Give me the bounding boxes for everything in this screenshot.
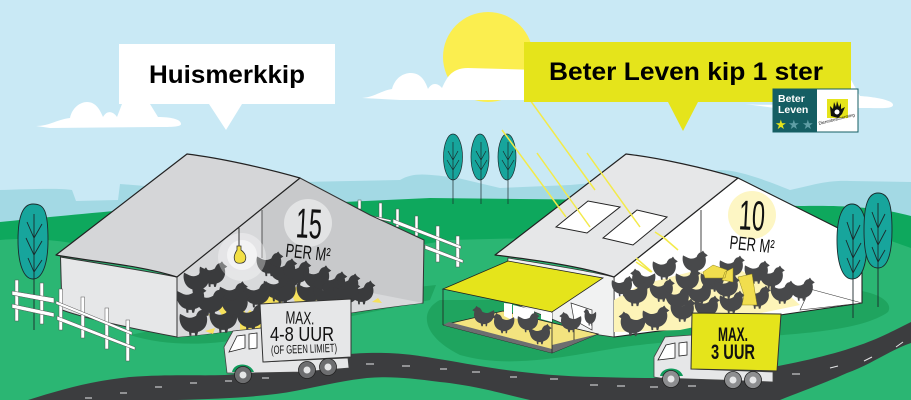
cab and chassis xyxy=(654,335,773,382)
duration label: MAX. xyxy=(718,325,748,346)
right truck: 3 UUR xyxy=(711,341,755,364)
floor xyxy=(443,311,598,353)
sun xyxy=(443,12,533,102)
Beter Leven logo: Beter xyxy=(778,93,805,105)
left barn xyxy=(56,154,424,337)
barn shadows xyxy=(130,285,889,361)
road markings xyxy=(85,342,903,398)
gable wall xyxy=(177,178,424,337)
cargo box xyxy=(260,299,351,362)
left truck: (OF GEEN LIMIET) xyxy=(271,341,337,357)
tree 2 xyxy=(471,134,489,204)
door xyxy=(571,303,592,330)
light bulb with glow xyxy=(218,228,266,281)
skylight 2 xyxy=(603,210,667,245)
hay bales xyxy=(703,265,757,305)
right truck xyxy=(654,313,781,388)
chickens left barn xyxy=(177,251,375,336)
sun rays xyxy=(502,100,678,272)
wheels xyxy=(234,358,336,384)
awning run xyxy=(443,261,603,353)
straw patches left barn xyxy=(205,285,382,334)
right fence behind left barn xyxy=(358,200,463,267)
Beter Leven logo xyxy=(773,89,858,133)
back trees xyxy=(444,134,516,204)
left barn density label xyxy=(284,199,332,266)
callout: Huismerkkip: Huismerkkip xyxy=(149,61,305,89)
duration label: MAX. xyxy=(285,308,315,328)
right barn density label: 10 xyxy=(738,191,766,240)
inner wall section xyxy=(177,210,262,337)
stars: ★ xyxy=(802,118,814,133)
interior straw xyxy=(614,270,800,332)
left barn density label: PER M² xyxy=(284,241,331,266)
callout: Beter Leven kip 1 ster: Beter Leven kip 1 ster xyxy=(549,58,823,86)
callout: Huismerkkip xyxy=(119,44,335,130)
road xyxy=(28,322,911,400)
chickens right barn xyxy=(472,251,815,344)
left barn density label: 15 xyxy=(295,199,323,248)
skylight 1 xyxy=(556,201,620,233)
stars: ★ xyxy=(775,118,787,133)
tree 4 xyxy=(837,204,867,318)
floor xyxy=(177,270,423,337)
Beter Leven logo: Dierenbescherming xyxy=(818,112,856,126)
left front fence xyxy=(12,280,135,361)
clouds xyxy=(36,68,893,128)
Beter Leven logo: Leven xyxy=(778,104,808,116)
right barn xyxy=(495,154,862,337)
cargo box xyxy=(691,313,781,371)
distant hills xyxy=(0,170,911,230)
left truck xyxy=(224,299,351,384)
right trees xyxy=(837,193,892,318)
posts xyxy=(443,289,574,353)
tree 3 xyxy=(498,134,516,204)
front wall xyxy=(60,257,177,337)
side wall under roof xyxy=(505,258,614,337)
callout: Beter Leven kip 1 ster xyxy=(524,42,851,131)
canopy xyxy=(443,261,603,312)
roof xyxy=(495,154,738,277)
right barn density label xyxy=(728,191,776,258)
tree 5 xyxy=(864,193,892,307)
wall openings xyxy=(504,303,552,322)
hand emblem xyxy=(827,99,848,118)
right barn density label: PER M² xyxy=(728,233,775,258)
left truck: 4-8 UUR xyxy=(270,324,334,346)
stars xyxy=(775,118,814,133)
foreground grass xyxy=(0,230,911,400)
roof xyxy=(56,154,300,277)
left tree xyxy=(18,204,48,330)
stars: ★ xyxy=(788,118,800,133)
background hill xyxy=(0,198,911,400)
tree 1 xyxy=(444,134,462,204)
gable wall xyxy=(614,178,862,337)
cab and chassis xyxy=(224,328,349,373)
wheels xyxy=(662,370,762,388)
